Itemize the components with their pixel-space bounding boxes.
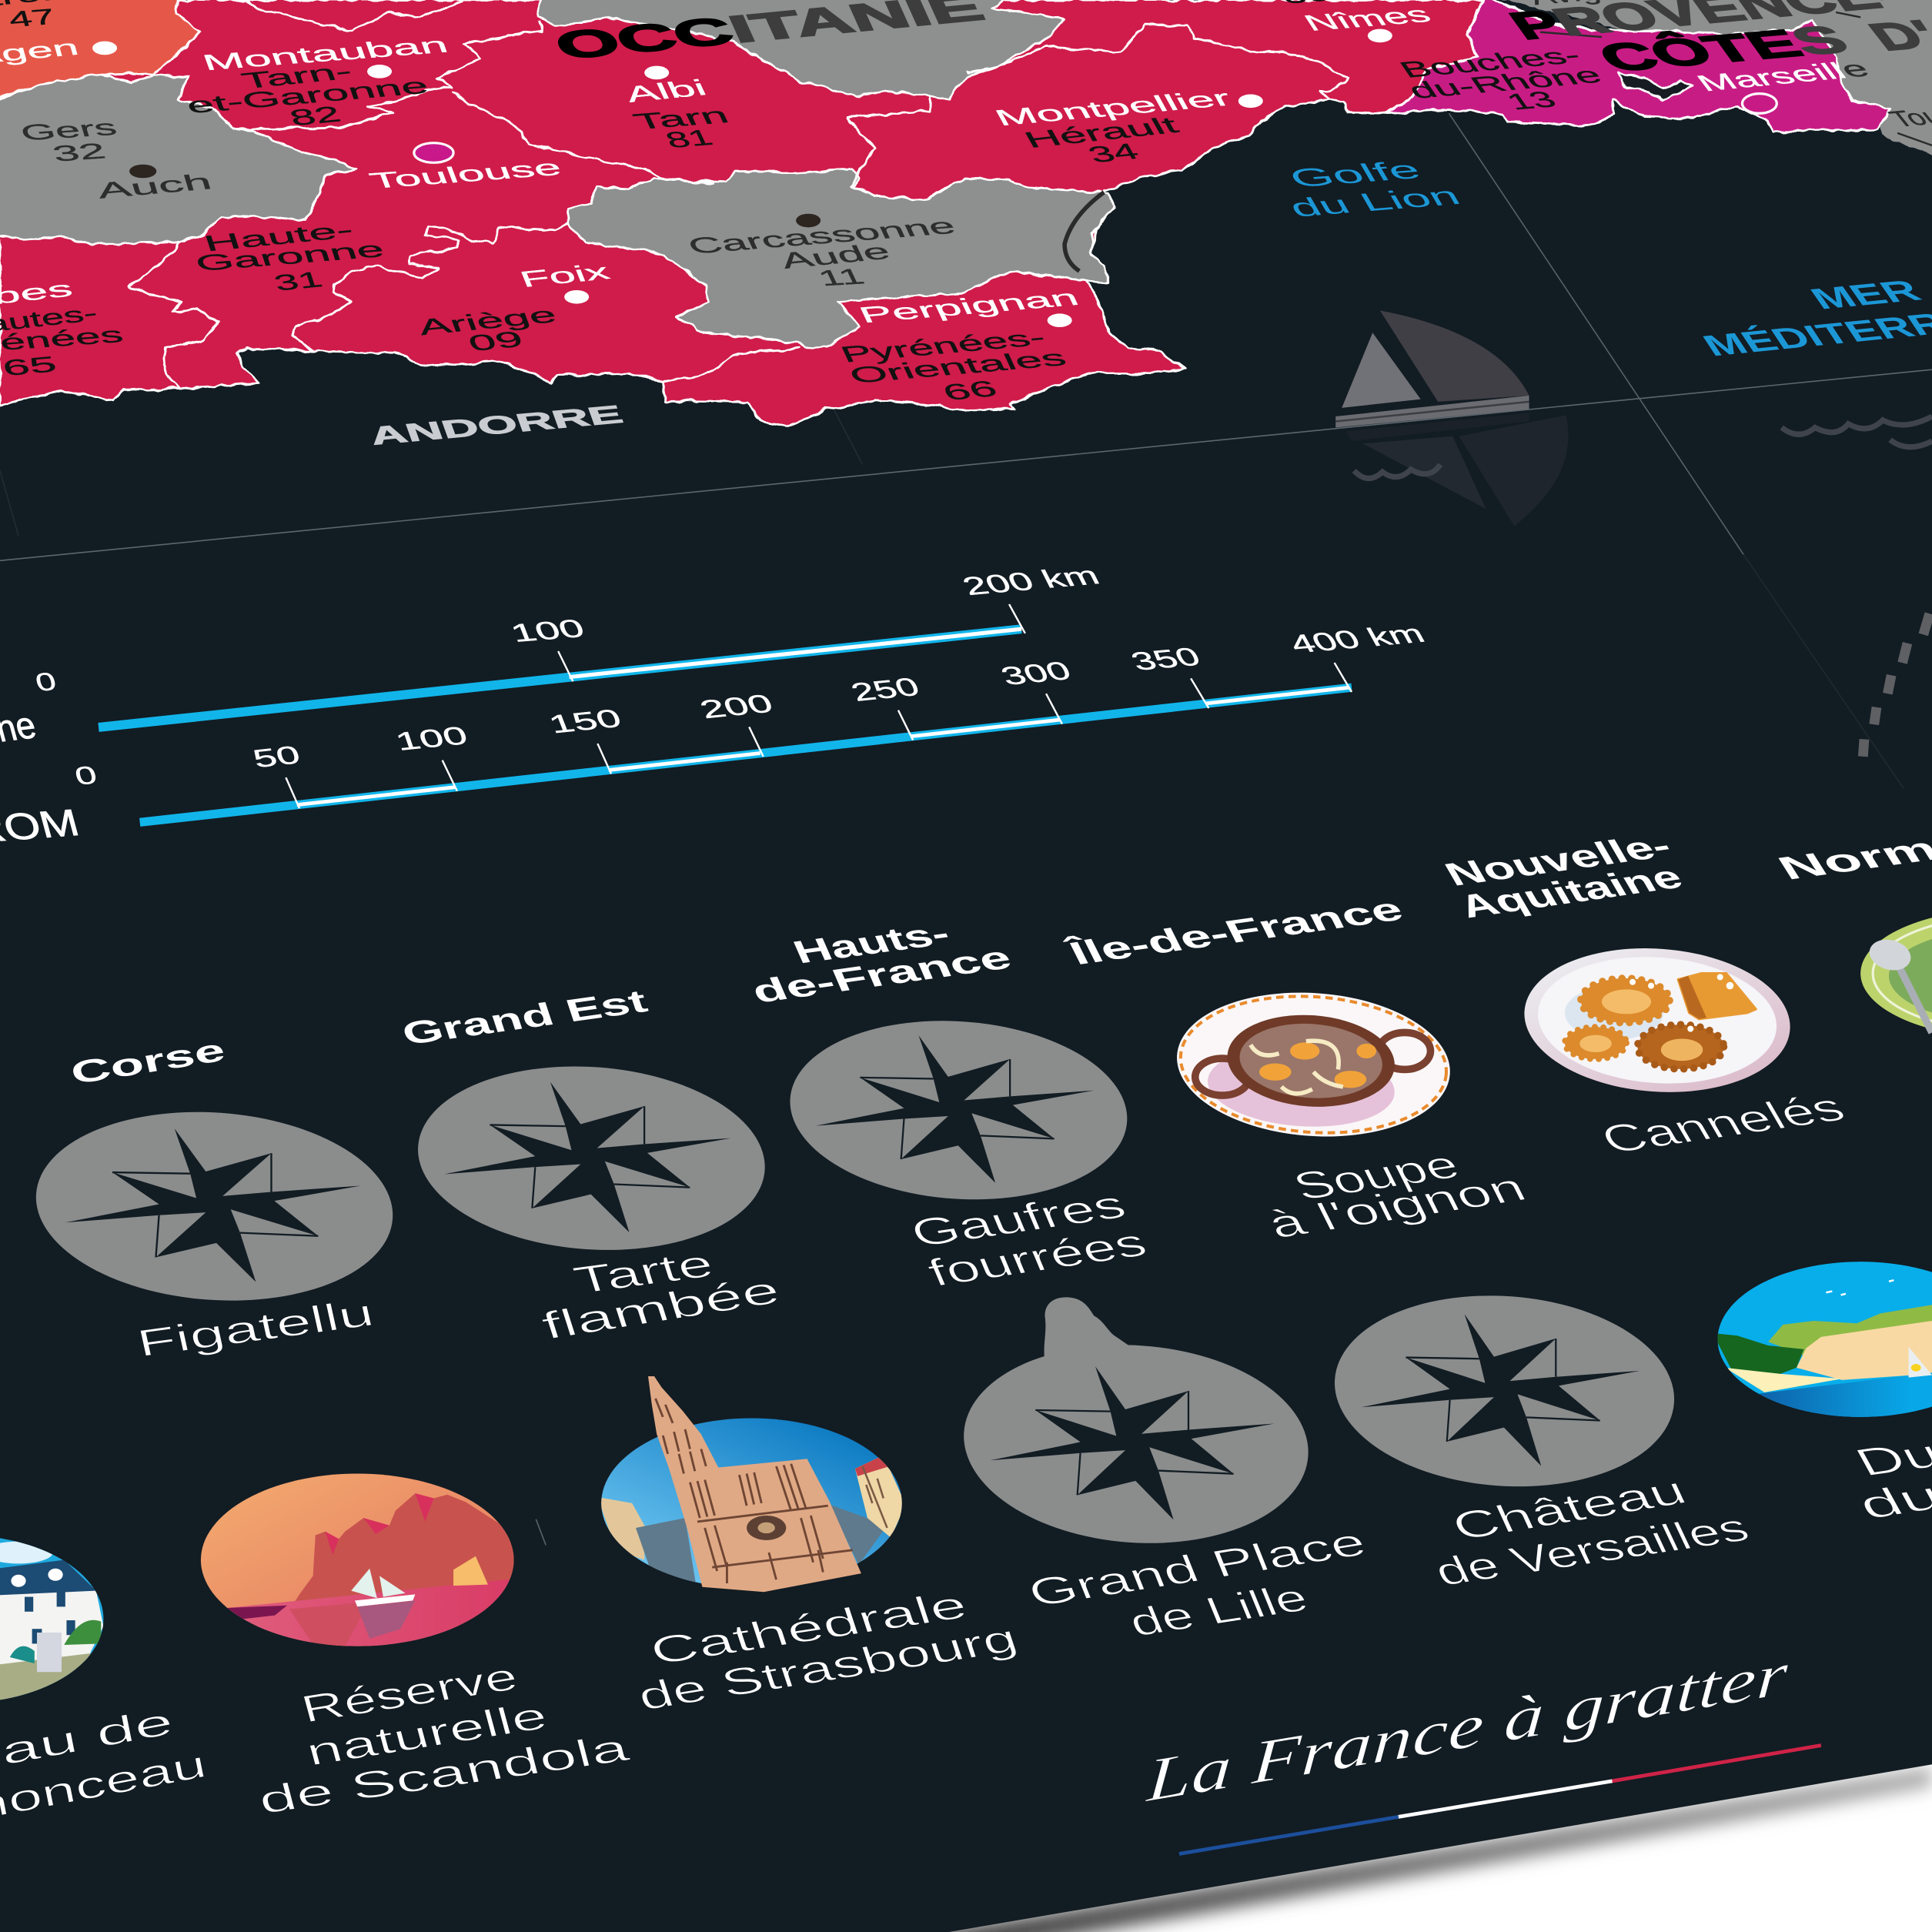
caption: Château de Versailles: de Versailles <box>1427 1506 1756 1594</box>
compass: Gaufres fourrées <box>784 1010 1133 1211</box>
label: 13: 13 <box>1501 87 1562 115</box>
poster shadow <box>863 1767 1932 1932</box>
label: Ariège: Ariège <box>415 303 560 340</box>
label: Hérault: Hérault <box>1020 113 1184 153</box>
label: Tarn-et-Garonne line 2: et-Garonne <box>183 74 432 119</box>
heading: Hauts-de-France <box>746 915 1017 1010</box>
label: Tarn-et-Garonne line 1: Tarn- <box>239 59 356 94</box>
scale bar: métropole: 100 <box>506 615 589 648</box>
scale bar: DROM: 400 km <box>1285 620 1430 659</box>
scale labels: 0 <box>32 667 59 697</box>
department borders <box>129 0 1348 388</box>
caption: Grand Place de Lille: de Lille <box>1122 1576 1315 1644</box>
label: 34: 34 <box>1084 139 1144 168</box>
dot: Montauban <box>367 65 392 79</box>
label: 66: 66 <box>938 376 1001 406</box>
region: Occitanie crimson <box>0 0 1491 426</box>
scale bar: DROM: 200 <box>696 690 777 724</box>
caption: Château de Versailles <box>1427 1469 1756 1594</box>
tricolour rule <box>1179 1745 1821 1854</box>
scale bar: DROM: 350 <box>1126 643 1205 676</box>
heading: Hauts-de-France: Hauts- <box>787 915 955 970</box>
dashed route <box>1863 613 1930 757</box>
caption: Gaufres fourrées: fourrées <box>921 1221 1153 1295</box>
label: Bouches-du-Rhône line 2: du-Rhône <box>1402 62 1607 103</box>
dot: Albi <box>644 66 669 79</box>
sea label: Golfe du Lion: du Lion <box>1284 182 1466 222</box>
lake: Étang de Berre <box>1619 74 1693 101</box>
caption: Gaufres fourrées: Gaufres <box>904 1182 1132 1255</box>
map labels <box>0 0 1932 406</box>
illustration: Réserve de Scandola <box>200 1473 514 1646</box>
label: Pyrénées-Orientales line 1: Pyrénées- <box>837 325 1050 367</box>
label: Montauban: Montauban <box>199 33 452 75</box>
region: Gers grey <box>0 74 357 244</box>
label: Perpignan: Perpignan <box>855 286 1083 328</box>
label: Haute-Garonne line 2: Garonne <box>192 237 387 276</box>
dot: Montpellier <box>1238 94 1263 108</box>
dot: Nîmes <box>1368 29 1392 42</box>
compass: Figatellu <box>30 1101 399 1312</box>
label: Nîmes: Nîmes <box>1299 2 1436 35</box>
sea label: Golfe du Lion <box>1284 156 1466 222</box>
scale bar: DROM <box>0 620 1430 854</box>
scale bar: DROM: 300 <box>996 657 1076 691</box>
sea label: Mer Méditerranée: MER <box>1803 274 1927 316</box>
illustration: Dune du Pilat <box>1718 1262 1932 1417</box>
heading: Corse: Corse <box>67 1032 229 1091</box>
scale bar: DROM: 150 <box>545 704 626 739</box>
illustration: Cathédrale de Strasbourg <box>597 1376 906 1592</box>
scale bar: métropole <box>0 561 1105 750</box>
icon: waves <box>1354 416 1932 479</box>
scale bar: DROM: 250 <box>847 674 924 707</box>
label: 31: 31 <box>271 267 326 296</box>
label: Foix: Foix <box>516 260 614 292</box>
region: Aude grey <box>567 169 1114 349</box>
heading: Île-de-France: Île-de-France <box>1061 891 1409 972</box>
grey internal borders PACA <box>1540 12 1932 145</box>
label: 82: 82 <box>286 102 345 131</box>
label: Tarn: Tarn <box>630 103 733 135</box>
caption: Château de Chenonceau <box>0 1700 210 1849</box>
scale labels: 0 <box>72 760 100 791</box>
label: Marseille: Marseill e <box>1690 55 1875 96</box>
title: La France à gratter: La France à gratter <box>1145 1640 1790 1815</box>
compass: Château de Versailles <box>1329 1285 1681 1498</box>
heading: Nouvelle-Aquitaine: Nouvelle- <box>1439 828 1679 893</box>
caption: Cathédrale de Strasbourg: de Strasbourg <box>632 1616 1023 1719</box>
caption: Gaufres fourrées <box>904 1182 1153 1295</box>
icon: onion soup <box>1172 984 1455 1145</box>
label: 09: 09 <box>465 327 526 356</box>
marker: Toulouse <box>414 143 453 162</box>
caption: Réserve naturelle de Scandola: naturelle <box>302 1694 552 1774</box>
label: Auch: Auch <box>94 169 215 204</box>
dot: Carcassonne <box>796 214 821 227</box>
label: Andorre: ANDORRE <box>366 400 627 451</box>
grid lines <box>0 113 1932 1545</box>
heading: Hauts-de-France: de-France <box>746 939 1017 1010</box>
caption: Grand Place de Lille: Grand Place <box>1021 1520 1372 1615</box>
scale bar: DROM: 50 <box>249 740 303 773</box>
caption: Tarte flambée <box>536 1242 785 1348</box>
label: Haute-Garonne line 1: Haute- <box>201 218 356 256</box>
dark border arc on Aude coast <box>1065 192 1104 271</box>
caption: Cathédrale de Strasbourg <box>632 1583 1023 1719</box>
scale bar: DROM: 100 <box>392 721 471 756</box>
region: Lot-et-Garonne orange <box>0 0 199 99</box>
compass: Grand Place de Lille <box>957 1297 1315 1554</box>
icon: sailboat <box>1335 310 1569 526</box>
label: 47: 47 <box>6 5 58 32</box>
caption: Figatellu: Figatellu <box>133 1292 378 1365</box>
label: Gers: Gers <box>18 115 120 145</box>
caption: Grand Place de Lille <box>1021 1520 1372 1644</box>
map shapes <box>0 0 1932 426</box>
caption: Réserve naturelle de Scandola: Réserve <box>296 1655 522 1731</box>
label: Carcassonne: Carcassonne <box>684 214 960 259</box>
marker: Marseille <box>1742 94 1777 113</box>
scale bar: métropole: 200 km <box>958 561 1105 601</box>
sea label: Mer Méditerranée <box>1696 274 1932 363</box>
panel: regional dishes <box>30 809 1932 1365</box>
label: Bouches-du-Rhône line 1: Bouches- <box>1394 42 1586 82</box>
caption: Réserve naturelle de Scandola <box>254 1655 634 1822</box>
icon: Normandy dish <box>1860 909 1932 1038</box>
caption: Réserve naturelle de Scandola: de Scandola <box>254 1727 634 1822</box>
heading: Grand Est: Grand Est <box>397 983 652 1051</box>
caption: Cathédrale de Strasbourg: Cathédrale <box>644 1583 972 1673</box>
illustration: Château de Chenonceau <box>0 1538 103 1700</box>
label: Aude: Aude <box>776 239 894 274</box>
label: 11: 11 <box>814 264 868 291</box>
dot: Foix <box>564 290 589 304</box>
heading: Nouvelle-Aquitaine: Aquitaine <box>1452 859 1690 925</box>
dot: Auch <box>129 165 156 178</box>
label: 32: 32 <box>50 139 109 167</box>
region title: Côtes: CÔTE S <box>1589 18 1858 80</box>
label: Toulouse: Toulouse <box>366 155 565 194</box>
panel: regional sights <box>0 1257 1932 1849</box>
label: Montpellier: Montpellier <box>991 86 1236 131</box>
caption: Château de Versailles: Château <box>1445 1469 1693 1548</box>
caption: Tarte flambée: Tarte <box>569 1242 718 1302</box>
region: PACA grey <box>1479 0 1932 158</box>
caption: Soupe à l'oignon <box>1260 1143 1533 1246</box>
region: Bouches-du-Rhône magenta <box>1385 0 1890 132</box>
label: Pyrénées-Orientales line 2: Orientales <box>845 346 1071 388</box>
caption: Tarte flambée: flambée <box>536 1269 785 1348</box>
label: Albi: Albi <box>620 75 711 107</box>
label: 65: 65 <box>0 352 59 381</box>
region: Aveyron grey <box>539 0 1065 100</box>
compass: Tarte flambée <box>412 1055 771 1262</box>
label: 81: 81 <box>661 125 717 153</box>
caption: Dune du Pilat <box>1847 1422 1932 1527</box>
caption: Soupe à l'oignon: Soupe <box>1285 1143 1466 1208</box>
dot: Agen <box>92 42 117 55</box>
caption: Cannelés: Cannelés <box>1593 1086 1853 1162</box>
heading: Nouvelle-Aquitaine <box>1439 828 1690 925</box>
dot: Perpignan <box>1048 313 1072 327</box>
icon: cannelés <box>1519 940 1795 1101</box>
caption: Soupe à l'oignon: à l'oignon <box>1260 1165 1533 1246</box>
sea label: Golfe du Lion: Golfe <box>1284 156 1426 193</box>
